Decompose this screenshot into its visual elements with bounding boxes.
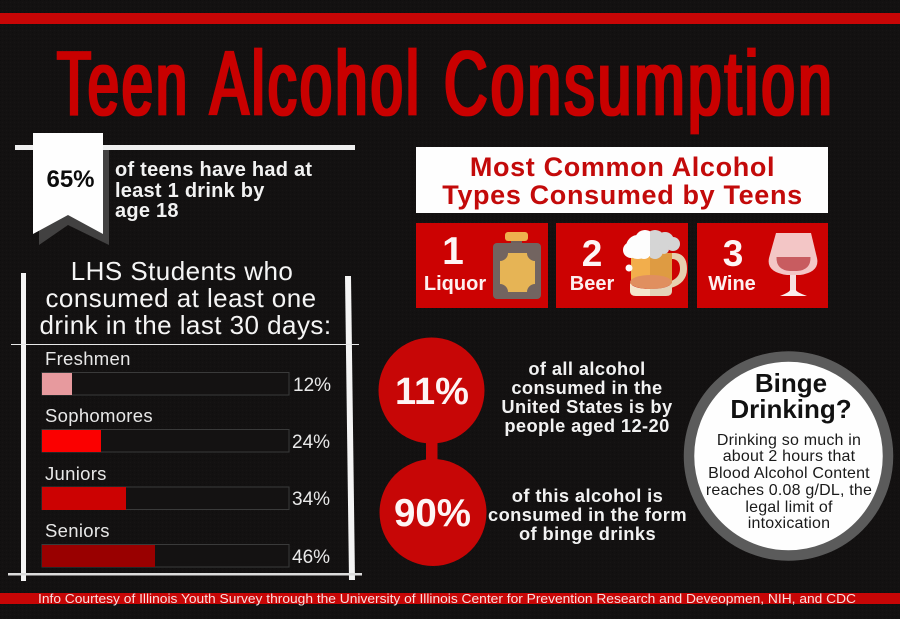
panel: 65% statistic — [15, 133, 355, 245]
bar: juniors: 34% — [292, 489, 330, 510]
bar: freshmen: 12% — [293, 375, 331, 396]
panel: liquor: Liquor — [424, 273, 486, 295]
chart heading: LHS Students who — [71, 256, 293, 286]
panel: LHS students bar chart — [8, 256, 362, 581]
title — [57, 34, 835, 134]
chart bottom rule — [8, 573, 362, 576]
90% description: consumed in the form — [488, 504, 687, 525]
bar: seniors: Seniors — [45, 520, 110, 541]
bar: seniors: 46% — [292, 547, 330, 568]
bar: sophomores: 24% — [292, 432, 330, 453]
binge definition: legal limit of — [745, 499, 833, 516]
circle: 90%: 90% — [394, 492, 471, 535]
panel: wine: 3 — [723, 233, 743, 274]
icon: ribbon — [33, 133, 103, 234]
circle: 11%: 11% — [395, 371, 469, 413]
binge definition: reaches 0.08 g/DL, the — [706, 482, 872, 499]
binge definition: Drinking so much in — [717, 432, 861, 449]
connector — [426, 430, 438, 470]
panel: beer — [556, 223, 688, 308]
panel: binge drinking definition — [689, 356, 888, 556]
bar: juniors: Juniors — [45, 463, 107, 484]
panel: most common alcohol types heading: Types Consumed by Teens — [442, 180, 803, 210]
icon: wine glass — [769, 233, 817, 296]
bar: sophomores — [42, 405, 330, 453]
65% description: of teens have had at — [115, 159, 312, 181]
65% description: least 1 drink by — [115, 180, 265, 202]
panel: beer: 2 — [582, 233, 602, 274]
bar: seniors — [42, 520, 330, 568]
chart heading: consumed at least one — [45, 283, 317, 313]
bar: juniors — [42, 463, 330, 510]
bar: freshmen — [42, 348, 331, 396]
panel: most common alcohol types heading — [416, 147, 828, 213]
65% value: 65% — [46, 166, 95, 193]
panel: 11% and 90% statistics — [378, 338, 687, 566]
heading rule — [11, 344, 359, 345]
right bracket — [345, 276, 355, 580]
binge heading: Binge — [755, 368, 827, 398]
left bracket — [21, 273, 26, 581]
11% description: of all alcohol — [528, 358, 646, 379]
panel: most common alcohol types heading: Most Common Alcohol — [470, 152, 775, 182]
binge definition: intoxication — [748, 515, 830, 532]
title: Alcohol — [210, 34, 422, 134]
bar: sophomores: Sophomores — [45, 405, 153, 426]
panel: liquor: 1 — [442, 230, 464, 273]
top red bar — [0, 13, 900, 24]
icon: ribbon shadow — [39, 150, 109, 245]
65% description: age 18 — [115, 200, 179, 222]
90% description: of binge drinks — [519, 523, 656, 544]
chart heading: drink in the last 30 days: — [39, 310, 332, 340]
90% description: of this alcohol is — [512, 485, 663, 506]
binge definition: about 2 hours that — [723, 448, 856, 465]
panel: liquor — [416, 223, 548, 308]
circle: 90% — [380, 459, 486, 566]
panel: wine: Wine — [708, 273, 756, 295]
footer bar: Info Courtesy of Illinois Youth Survey through the University of Illinois Center for Prevention Research and Deveopmen, NIH, and CDC — [38, 592, 856, 606]
icon: beer mug — [623, 230, 687, 296]
bar: freshmen: Freshmen — [45, 348, 131, 369]
panel: beer: Beer — [570, 273, 614, 295]
circle: 11% — [378, 338, 484, 444]
panel: wine — [697, 223, 828, 308]
11% description: consumed in the — [511, 377, 663, 398]
11% description: people aged 12-20 — [504, 415, 670, 436]
binge definition: Blood Alcohol Content — [708, 465, 870, 482]
divider line — [15, 145, 355, 150]
binge heading: Drinking? — [730, 394, 852, 424]
icon: liquor flask — [493, 232, 541, 299]
title: Teen — [57, 34, 190, 134]
11% description: United States is by — [501, 396, 673, 417]
